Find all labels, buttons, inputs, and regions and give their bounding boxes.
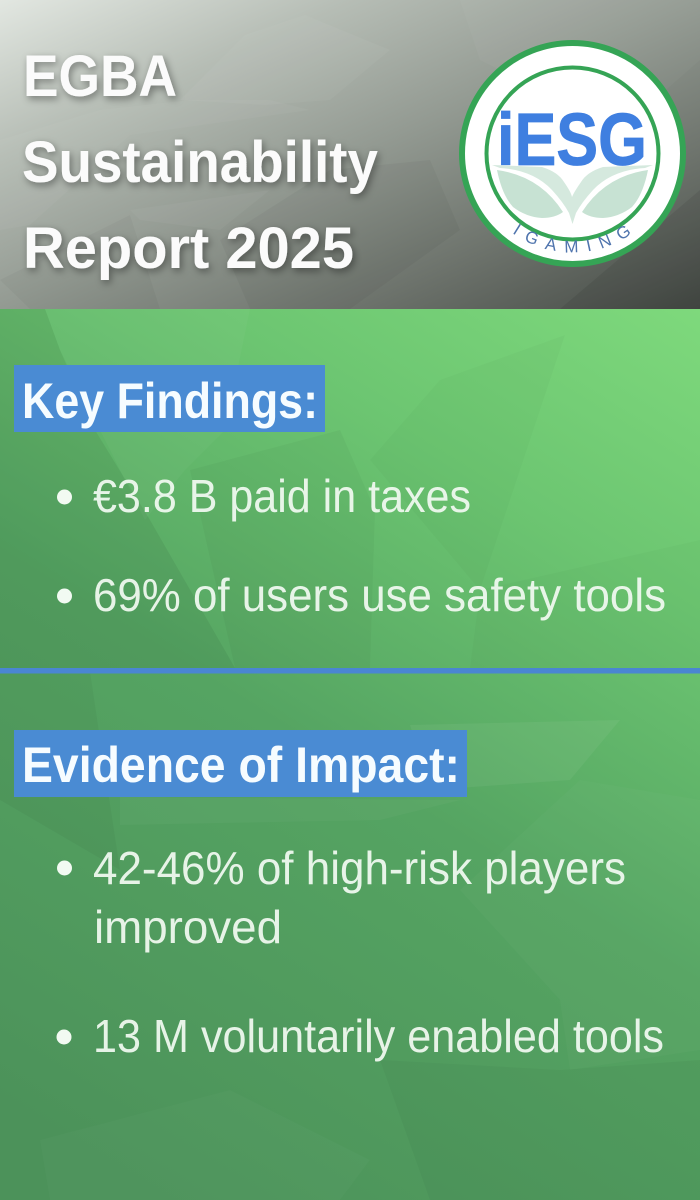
panel: header background [0, 0, 700, 309]
list: key findings: 69% of users use safety tools [93, 569, 666, 621]
panel: green background [0, 309, 700, 1200]
title: Report 2025 [23, 216, 354, 281]
icon: iESG iGaming logo [459, 40, 686, 267]
logo wordmark: iESG [497, 98, 647, 181]
list: evidence of impact: 42-46% of high-risk players [93, 842, 626, 894]
title: Sustainability [22, 130, 378, 195]
title [22, 44, 378, 281]
list: evidence of impact [56, 842, 664, 1062]
heading: Evidence of Impact: Evidence of Impact: [22, 737, 460, 793]
icon: leaves [492, 165, 653, 224]
list: evidence of impact: improved [94, 901, 282, 953]
list: evidence of impact: 13 M voluntarily enabled tools [93, 1010, 664, 1062]
list: key findings: €3.8 B paid in taxes [93, 470, 471, 522]
logo caption: IGAMING [513, 224, 630, 253]
heading: Key Findings: Key Findings: [22, 373, 318, 429]
divider [0, 668, 700, 674]
list: key findings [57, 470, 666, 621]
title: EGBA [23, 44, 177, 109]
